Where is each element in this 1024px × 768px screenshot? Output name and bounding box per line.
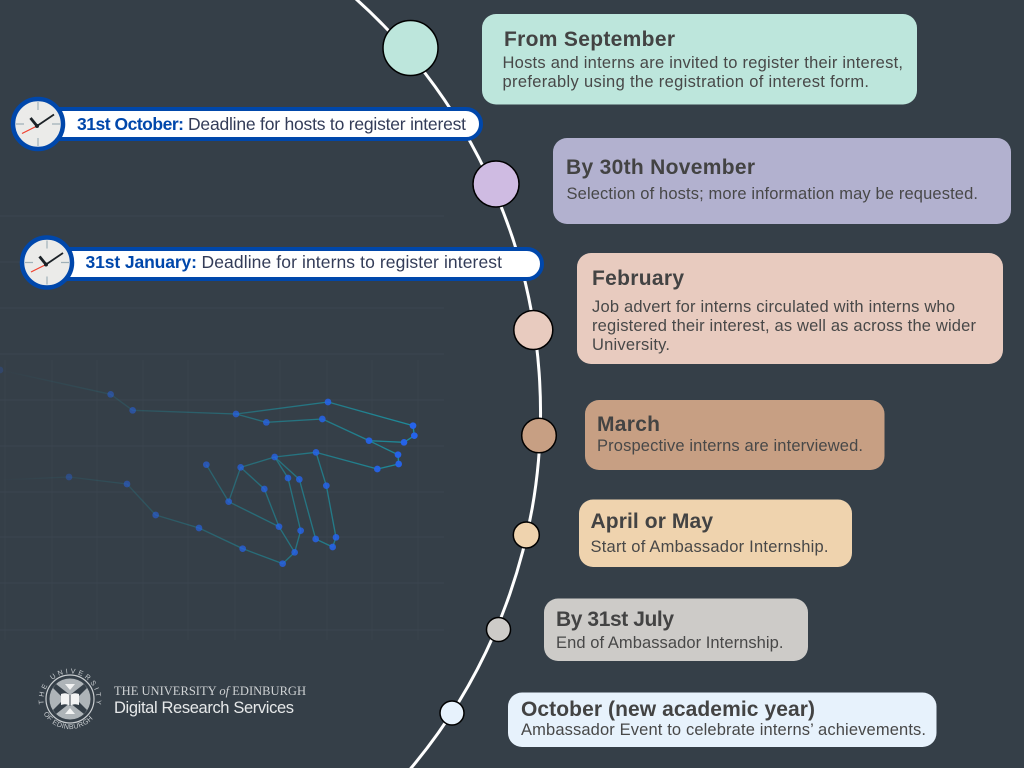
panel: February — [577, 253, 1003, 364]
panel: April or May — [579, 500, 852, 567]
banner text: 31st January: — [86, 252, 197, 272]
heading: By 31st July — [556, 608, 674, 631]
body text: End of Ambassador Internship. — [556, 634, 784, 652]
panel: By 31st July — [544, 598, 808, 661]
body text: Ambassador Event to celebrate interns’ achievements. — [521, 721, 926, 739]
banner text: Deadline for hosts to register interest — [188, 114, 466, 134]
icon: clock — [13, 99, 63, 149]
banner pill — [50, 249, 542, 279]
timeline marker: March — [522, 418, 556, 453]
hand skeleton illustration — [0, 367, 418, 567]
body text: Job advert for interns circulated with interns who — [592, 298, 955, 316]
icon: university seal — [38, 668, 102, 730]
logo text: department: Digital Research Services — [114, 699, 294, 717]
logo text: university name: THE UNIVERSITY of EDINBURGH — [114, 684, 306, 698]
timeline marker: October — [440, 701, 464, 725]
banner text: 31st October: — [77, 114, 184, 134]
heading: April or May — [590, 510, 713, 533]
heading: From September — [504, 28, 675, 51]
timeline marker: February — [514, 310, 553, 350]
body text: Selection of hosts; more information may be requested. — [566, 185, 978, 203]
body text: University. — [592, 336, 670, 354]
panel: From September — [482, 14, 917, 104]
body text: registered their interest, as well as across the wider — [592, 317, 976, 335]
timeline marker: April or May — [513, 522, 539, 548]
heading: March — [597, 413, 660, 436]
deadline banner: 31st January — [22, 238, 542, 288]
icon: clock — [22, 238, 72, 288]
banner text: Deadline for interns to register interest — [202, 252, 502, 272]
body text: Hosts and interns are invited to register their interest, — [502, 54, 903, 72]
body text: Start of Ambassador Internship. — [590, 538, 828, 556]
icon: university seal: THE UNIVERSITY — [38, 668, 102, 704]
timeline marker: By 30th November — [473, 161, 519, 207]
timeline marker: From September — [383, 20, 438, 76]
timeline curve — [352, 0, 541, 768]
body text: Prospective interns are interviewed. — [597, 437, 863, 455]
logo: University of Edinburgh Digital Research Services — [38, 668, 306, 730]
heading: February — [592, 267, 684, 290]
icon: university seal: OF EDINBURGH — [44, 712, 92, 730]
panel: By 30th November — [553, 138, 1011, 224]
heading: By 30th November — [566, 156, 755, 179]
panel: March — [585, 400, 884, 470]
deadline banner: 31st October — [13, 99, 481, 149]
panel: October — [508, 692, 936, 747]
heading: October (new academic year) — [521, 698, 815, 721]
banner pill — [40, 109, 481, 139]
body text: preferably using the registration of interest form. — [502, 73, 869, 91]
timeline marker: By 31st July — [486, 618, 510, 642]
